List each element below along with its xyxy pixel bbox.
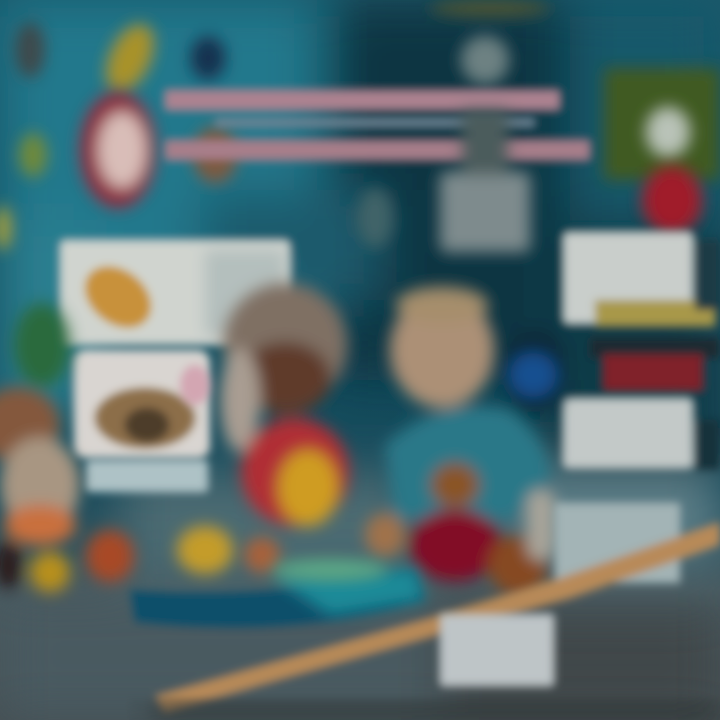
stacked cards right (563, 232, 720, 470)
middle child (220, 283, 349, 526)
plant left (14, 303, 70, 387)
toy tray (130, 526, 425, 628)
green poster with figure top right (604, 68, 720, 234)
paper card on floor (440, 614, 554, 686)
wooden table edge (155, 503, 720, 712)
dark floor edge (150, 704, 720, 720)
white chart cards left (60, 240, 290, 492)
title text band, blurred and illegible in the reference (165, 90, 590, 160)
left child and toys (0, 387, 134, 592)
right child (365, 287, 555, 595)
wall decorations (0, 0, 550, 250)
grey poster centre (440, 110, 530, 252)
blue object behind child (503, 328, 567, 412)
red heart badge by the title (80, 92, 237, 208)
